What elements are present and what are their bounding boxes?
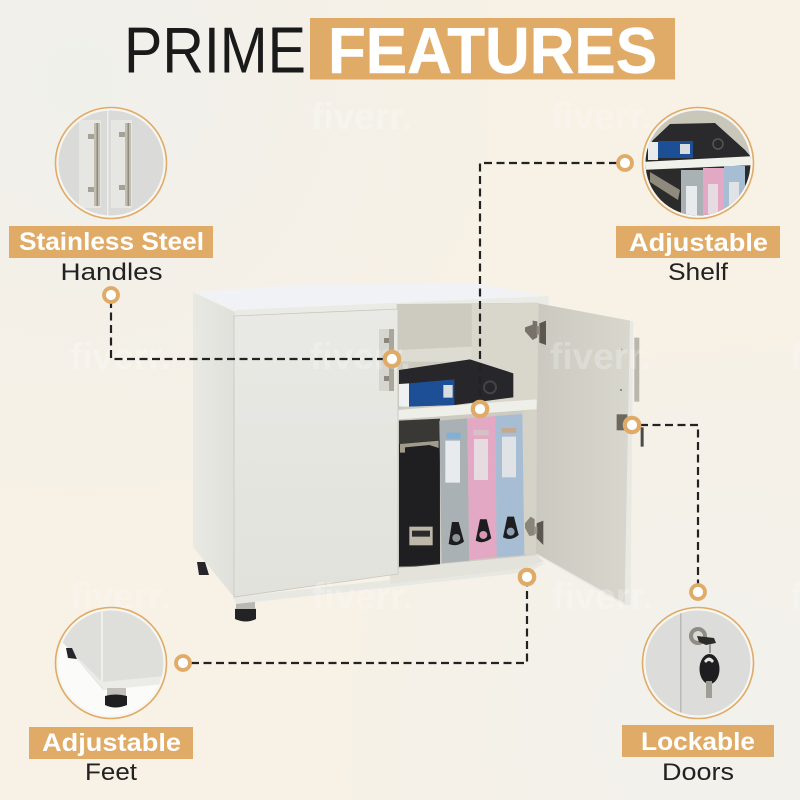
- watermarks: fiverr.: [552, 576, 653, 617]
- grey binder: [439, 418, 469, 563]
- black box file: [399, 440, 440, 567]
- watermarks: fiverr.: [311, 96, 412, 137]
- cabinet top surface: [193, 283, 549, 310]
- connector: shelf: [473, 156, 632, 416]
- label bar: [616, 226, 780, 258]
- pink binder: [467, 416, 497, 560]
- top front edge: [235, 296, 549, 316]
- label text: Adjustable: [42, 729, 181, 757]
- middle shelf: [398, 399, 537, 419]
- front foot: [235, 601, 256, 622]
- callout: lockable doors: [622, 605, 774, 786]
- label text: Stainless Steel: [19, 228, 204, 256]
- watermarks: fiverr.: [310, 336, 411, 377]
- closed door handle: [379, 329, 394, 391]
- back foot: [197, 562, 209, 575]
- callout: adjustable shelf: [616, 105, 780, 286]
- left side panel: [193, 292, 235, 597]
- sublabel: Feet: [85, 759, 137, 786]
- title word: FEATURES: FEATURES: [328, 14, 657, 87]
- icon: shelf close-up: [642, 106, 754, 220]
- base strip: [233, 563, 545, 604]
- bottom shelf: [390, 555, 544, 584]
- watermarks: fiverr.: [551, 96, 652, 137]
- closed door: [234, 309, 398, 597]
- back wall: [397, 303, 538, 577]
- title highlight bar: [310, 18, 675, 80]
- label text: Lockable: [641, 728, 755, 756]
- label bar: [9, 226, 213, 258]
- cabinet interior: [390, 303, 644, 605]
- watermarks: [70, 96, 800, 617]
- watermarks: fiverr.: [70, 336, 171, 377]
- label bar: [622, 725, 774, 757]
- icon: lock and key close-up: [640, 605, 756, 721]
- label bar: [29, 727, 193, 759]
- sublabel: Doors: [662, 759, 734, 786]
- title: [124, 14, 675, 87]
- label text: Adjustable: [629, 229, 768, 257]
- sublabel: Handles: [60, 259, 162, 286]
- watermarks: fiverr.: [70, 576, 171, 617]
- blue binder: [495, 414, 524, 557]
- lower dark cavity: [399, 419, 440, 567]
- connector: lock: [625, 418, 705, 599]
- connector: handles: [104, 288, 399, 366]
- callout: adjustable feet: [29, 605, 193, 786]
- callout: stainless steel handles: [9, 108, 213, 286]
- icon: handles close-up: [55, 108, 167, 220]
- bottom hinge: [525, 517, 543, 545]
- upper binder: [399, 359, 513, 407]
- icon: feet close-up: [55, 605, 167, 721]
- title word: PRIME: PRIME: [124, 14, 306, 86]
- outer door handle: [634, 338, 639, 402]
- connector: feet: [176, 570, 534, 670]
- door lock: [617, 414, 627, 430]
- right wall below shelf: [522, 409, 537, 557]
- top hinge: [525, 321, 546, 345]
- sublabel: Shelf: [668, 259, 728, 286]
- watermarks: fiverr.: [312, 576, 413, 617]
- cabinet photo: [193, 283, 644, 622]
- watermarks: fiverr.: [550, 336, 651, 377]
- open door: [536, 303, 644, 605]
- key: [641, 427, 644, 447]
